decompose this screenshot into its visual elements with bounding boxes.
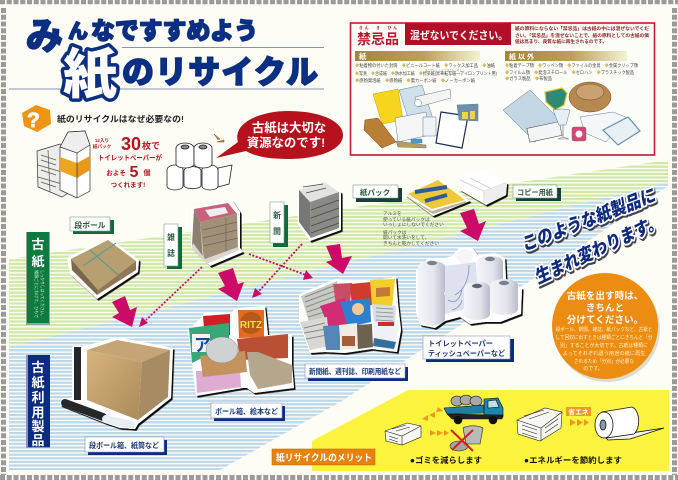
callout: 30 cartons make 5 rolls: つくれます! <box>111 181 145 189</box>
label band: waste paper: 種類ごとにわけて、ひもで <box>33 270 40 318</box>
callout: 30 cartons make 5 rolls: トイレットペーパーが <box>98 153 162 162</box>
arrow: dotted magazine to box <box>146 267 202 320</box>
label band: waste paper: しっかりしばってください。 <box>39 270 46 318</box>
tag: toilet paper products: トイレットペーパー <box>428 339 493 348</box>
tag: paper carton: 紙パック <box>360 187 390 197</box>
label band: recycled products <box>26 355 50 448</box>
icon: paper roll <box>595 407 664 440</box>
icon: orange arrows to paper roll <box>570 419 589 426</box>
arrow: newspaper down <box>326 244 352 274</box>
description text <box>515 25 649 45</box>
photo: boxes and picture books <box>188 306 294 396</box>
callout: 30 cartons make 5 rolls: 5 <box>130 164 139 181</box>
callout: 30 cartons make 5 rolls: 12入り <box>95 138 109 144</box>
blue striped band <box>9 182 668 470</box>
callout: sort paper circle: 古紙を出す時は、 <box>567 290 643 302</box>
icon: question mark <box>22 105 51 132</box>
tag: boxes products: ボール箱、絵本など <box>215 407 279 416</box>
tag: cardboard box products: 段ボール箱、紙筒など <box>89 441 160 450</box>
note: carton preparation: 紙パックは <box>383 229 407 236</box>
tag: cardboard <box>70 217 114 234</box>
description text: 紙の原料にならない「禁忌品」は古紙の中には混ぜないでくだ <box>515 25 649 32</box>
title: み <box>26 16 63 57</box>
title <box>9 16 324 105</box>
title: 紙 <box>63 45 117 105</box>
icon: truck <box>444 395 503 424</box>
photo: cardboard box and tubes <box>60 337 173 429</box>
non-paper list: ◆フイルム類 ◆発泡スチロール ◆セロハン ◆プラスチック製品 <box>505 69 634 76</box>
slanted headline: このような紙製品に <box>521 183 657 255</box>
label: energy saving <box>566 407 591 416</box>
non-paper list <box>505 51 638 82</box>
photo: newspaper stack <box>297 181 341 241</box>
description text: 値は高まり、良質な紙に再生されるのです。 <box>515 38 607 45</box>
tag: newspaper: 新 <box>273 210 281 220</box>
accent marks near rolls <box>214 134 224 142</box>
note: carton preparation: 使っている紙パックは <box>383 216 430 223</box>
speech bubble: 資源なのです! <box>247 135 325 150</box>
tag: magazine: 雑 <box>167 232 175 242</box>
icon: crossed-out garbage <box>450 426 483 451</box>
callout: sort paper circle: 段ボール、新聞、雑誌、紙パックなど、古紙と <box>556 326 652 333</box>
note: carton preparation: きちんと乾かしてください <box>383 240 439 247</box>
tag: cardboard box products <box>85 437 167 455</box>
callout: 30 cartons make 5 rolls: およそ <box>106 169 126 177</box>
heading: prohibited: きん き ひん <box>359 25 397 30</box>
tag: boxes products <box>211 403 285 421</box>
tag: magazine: 誌 <box>167 248 175 258</box>
label band: waste paper: 古 <box>31 237 45 252</box>
tag: toilet paper products <box>423 336 514 362</box>
merit label <box>272 449 375 465</box>
red banner <box>405 23 511 45</box>
photo: boxes and picture books: ア <box>194 336 211 355</box>
note: carton preparation <box>383 210 444 247</box>
arrow: dotted magazine to newspaper <box>249 254 306 275</box>
heading: prohibited: 禁忌品 <box>357 31 399 47</box>
callout: sort paper circle: 分けてください。 <box>567 314 643 326</box>
callout: sort paper circle: 別」することが大切です。古紙は種類に <box>560 342 648 349</box>
icon: newspaper bundle one <box>385 423 421 445</box>
callout: sort paper circle: きちんと <box>586 303 624 314</box>
tag: newspaper products: 新聞紙、週刊誌、印刷用紙など <box>309 367 402 376</box>
tag: toilet paper products: ティッシュペーパーなど <box>428 349 506 358</box>
note: carton preparation: 開いて水洗いをして、 <box>383 234 429 241</box>
non-paper list: ◆ガラス製品 ◆布製品 <box>505 75 552 82</box>
tag: newspaper products <box>305 364 408 381</box>
callout: sort paper circle: して回収に出すときは種類ごとにきちんと「分 <box>556 334 652 341</box>
label band: recycled products: 古 <box>31 360 45 375</box>
callout: 30 cartons make 5 rolls: 枚で <box>142 140 160 151</box>
photo: cardboard stack <box>67 237 139 299</box>
note: carton preparation: アルミを <box>383 210 402 217</box>
red banner: 混ぜないでください。 <box>410 29 508 42</box>
paper list <box>355 51 497 84</box>
arrow: dotted newspaper to picture book <box>259 244 302 291</box>
panel: prohibited items <box>350 23 654 155</box>
title: ん <box>68 21 88 43</box>
photo: magazine stack <box>191 200 243 266</box>
photo: toilet paper and tissue <box>416 247 522 328</box>
tag: paper carton <box>353 185 402 202</box>
non-paper list: 紙以外 <box>509 52 536 61</box>
callout: sort paper circle: されるため「分別」が必要な <box>574 358 634 365</box>
label band: recycled products: 用 <box>31 405 45 420</box>
paper list: 紙 <box>359 51 367 61</box>
arrow: magazine down <box>218 268 244 301</box>
paper list: ◆粘着物の付いた封筒 ◆ビニールコート紙 ◆ワックス加工品 ◆油紙 <box>355 62 495 69</box>
tag: newspaper <box>270 202 288 247</box>
arrow head: magazine to newspaper <box>303 270 313 280</box>
arrow: carton down <box>460 209 486 241</box>
illustration: toilet rolls <box>167 143 232 190</box>
callout: 30 cartons make 5 rolls: 30 <box>121 134 141 154</box>
green striped band <box>9 160 668 347</box>
tag: magazine <box>164 224 182 269</box>
text: reduce garbage: ●ゴミを減らします <box>410 455 482 465</box>
tag: copy paper: コピー用紙 <box>517 188 554 197</box>
subheading: why recycling: 紙のリサイクルはなぜ必要なの! <box>57 113 184 124</box>
label band: recycled products: 製 <box>31 419 45 434</box>
title: なですすめよう <box>91 18 258 45</box>
tag: copy paper <box>513 185 561 201</box>
arrow: cardboard down <box>112 296 137 327</box>
callout: sort paper circle <box>552 273 660 382</box>
callout: 30 cartons make 5 rolls: 個 <box>144 168 150 177</box>
label: energy saving: 省エネ <box>568 408 589 416</box>
photo: copy paper <box>459 170 507 205</box>
label band: waste paper <box>26 232 50 325</box>
speech bubble <box>216 111 343 159</box>
non-paper list: ◆粘着テープ類 ◆ワッペン類 ◆ファイルの金具 ◆金属クリップ類 <box>505 62 638 69</box>
paper list: ◆写真 ◆合成紙 ◆防水加工紙 ◆捺染紙(昇華転写紙—アイロンプリント用) <box>355 70 497 77</box>
paper list: なっせんし しょうかてんしゃし <box>425 68 462 72</box>
icon: orange arrows to bin <box>430 430 449 436</box>
icon: orange arrows to truck <box>422 407 443 421</box>
paper list: ◆感熱発泡紙 ◆感熱紙 ◆裏カーボン紙 ◆ノーカーボン紙 <box>355 77 475 84</box>
title: のリサイクル <box>122 54 318 90</box>
callout: sort paper circle: よってそれぞれ違う用途の紙に再生 <box>562 350 646 357</box>
illustration: prohibited non-paper items <box>503 82 640 145</box>
merit label: 紙リサイクルのメリット <box>276 452 372 464</box>
yellow merit background <box>312 390 669 471</box>
arrow head: newspaper to picture book <box>252 288 262 298</box>
callout: 30 cartons make 5 rolls: 紙パック <box>93 143 112 150</box>
tag: cardboard: 段ボール <box>74 220 106 230</box>
callout: 30 cartons make 5 rolls <box>93 134 162 189</box>
photo: newspapers and magazines <box>299 277 401 353</box>
icon: newspaper bundle two <box>517 408 562 441</box>
label band: recycled products: 品 <box>31 433 45 448</box>
photo: carton pack <box>405 178 470 216</box>
tag: newspaper: 聞 <box>273 227 281 236</box>
label band: recycled products: 紙 <box>31 375 45 390</box>
callout: sort paper circle: のです。 <box>583 366 603 372</box>
label band: recycled products: 利 <box>31 390 45 405</box>
note: carton preparation: いっしょにしないでください <box>383 221 444 228</box>
arrow head: magazine to box <box>139 317 148 327</box>
description text: さい。「禁忌品」を混ぜないことで、紙の原料としての古紙の価 <box>515 32 649 39</box>
illustration: milk cartons and toilet-paper stock <box>37 131 90 198</box>
label band: waste paper: 紙 <box>31 254 45 269</box>
photo: boxes and picture books: RITZ <box>240 320 262 331</box>
illustration: prohibited paper items <box>364 85 478 148</box>
icon: question mark: ? <box>27 109 40 132</box>
speech bubble: 古紙は大切な <box>252 120 326 135</box>
text: save energy: ●エネルギーを節約します <box>524 455 622 465</box>
